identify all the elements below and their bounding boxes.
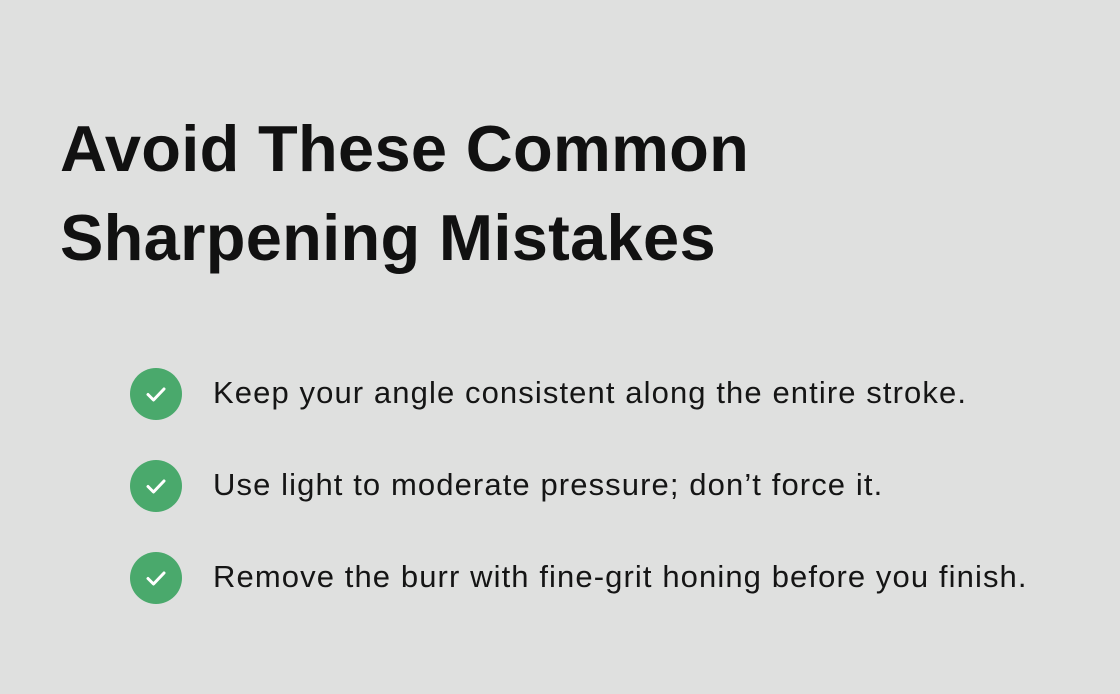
item 3 [130, 552, 1028, 604]
item 1 [130, 368, 967, 420]
icon: check circle [130, 368, 182, 420]
item 2 [130, 460, 883, 512]
icon: check circle [130, 460, 182, 512]
title [60, 112, 749, 274]
icon: check circle [130, 552, 182, 604]
text 2: Use light to moderate pressure; don’t force it. [213, 467, 883, 502]
text 1: Keep your angle consistent along the entire stroke. [213, 375, 967, 410]
title: Avoid These Common [60, 112, 749, 185]
text 3: Remove the burr with fine-grit honing before you finish. [213, 559, 1028, 594]
title: Sharpening Mistakes [60, 201, 716, 274]
checklist [130, 368, 1028, 604]
